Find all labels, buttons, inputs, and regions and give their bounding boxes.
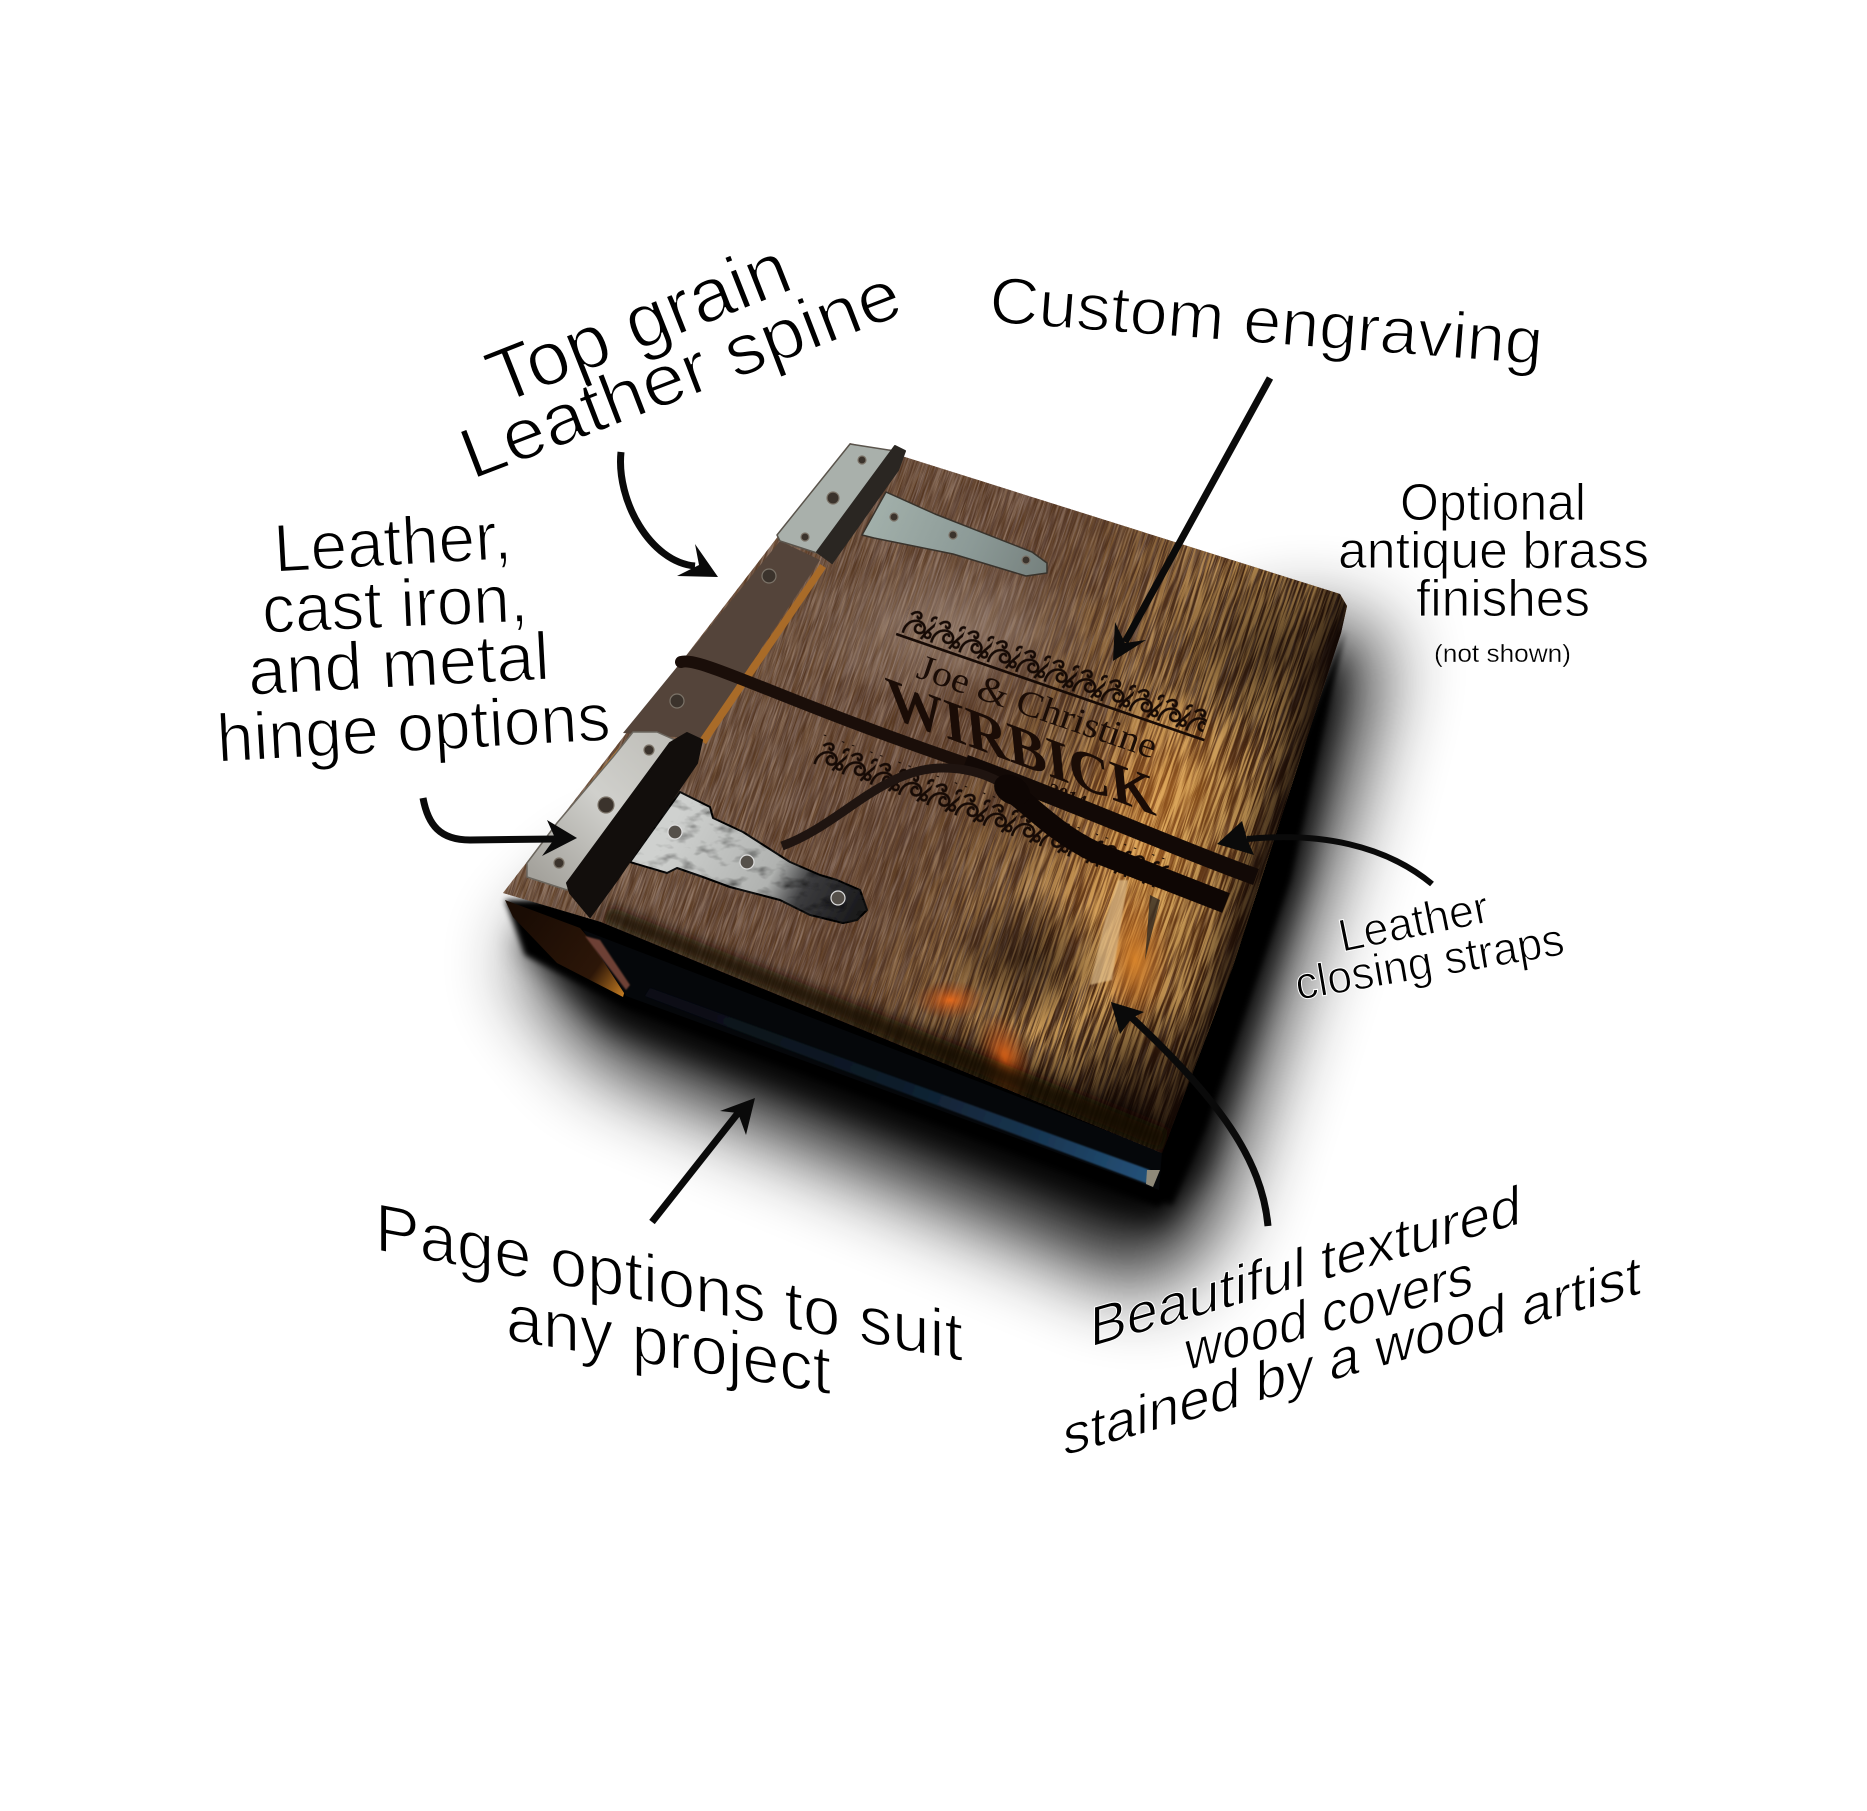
- leather corner wrap: [505, 900, 627, 997]
- label: hinge options: cast iron,: [260, 560, 529, 648]
- infographic canvas: [220, 256, 1647, 1454]
- label: hinge options: hinge options: [215, 679, 612, 777]
- leather spine strip: [623, 541, 820, 739]
- engraving: top ornament: [896, 605, 1214, 741]
- engraving: bottom ornament: [812, 734, 1171, 891]
- engraving: WIRBICK: WIRBICK: [883, 663, 1158, 829]
- arrow: to strap: [1217, 821, 1432, 884]
- label: optional antique brass finishes: antique brass: [1338, 522, 1649, 580]
- label: leather closing straps: Leather: [1334, 881, 1493, 962]
- label: top grain leather spine: Leather spine: [449, 254, 912, 495]
- label: optional antique brass finishes: finishes: [1416, 570, 1590, 628]
- leather knot: [989, 768, 1035, 812]
- label: optional antique brass finishes: [1338, 474, 1649, 668]
- engraving: date: 2014: [1044, 779, 1089, 814]
- lower hinge knuckle: [567, 733, 702, 917]
- arrow: to spine: [621, 452, 718, 577]
- upper hinge strap: [862, 492, 1047, 576]
- label: optional antique brass finishes: Optional: [1400, 474, 1586, 532]
- lower hinge plate: [527, 732, 675, 890]
- label: beautiful wood covers: stained by a wood artist: [1063, 1243, 1641, 1469]
- book drop shadow: [515, 620, 1385, 1290]
- label: optional antique brass finishes: (not shown): [1434, 640, 1571, 668]
- lower hinge strap: [630, 792, 867, 923]
- arrow: to engraving: [1113, 378, 1270, 661]
- book lower edge: black cover thickness: [505, 900, 1232, 1207]
- wood front cover: [503, 443, 1347, 1153]
- label: hinge options: Leather,: [272, 498, 513, 587]
- upper hinge knuckle: [817, 446, 905, 563]
- book: [437, 378, 1432, 1226]
- arrow: to wood cover: [1111, 1002, 1268, 1226]
- label: beautiful wood covers: wood covers: [1184, 1243, 1473, 1384]
- screws: [554, 456, 1030, 905]
- label: hinge options: [215, 498, 612, 777]
- engraving: Joe and Christine: Joe & Christine: [912, 647, 1163, 766]
- leather tie: [782, 768, 1226, 903]
- label: custom engraving: Custom engraving: [987, 262, 1546, 379]
- label: page options: Page options to suit: [375, 1189, 963, 1376]
- label: beautiful wood covers: Beautiful textured: [1090, 1173, 1521, 1360]
- book black side edge: [1140, 630, 1345, 1205]
- upper hinge plate: [777, 444, 895, 554]
- label: top grain leather spine: Top grain: [475, 225, 802, 421]
- label: leather closing straps: closing straps: [1291, 913, 1568, 1010]
- label: page options: any project: [506, 1278, 831, 1409]
- arrow: to hinge: [423, 798, 577, 856]
- arrow: to pages: [652, 1098, 755, 1222]
- page block: [583, 930, 1162, 1190]
- leather band strap: [681, 661, 1256, 877]
- spine outer orange edge: [527, 745, 621, 867]
- spine orange edge: [699, 564, 826, 744]
- label: hinge options: and metal: [246, 618, 551, 710]
